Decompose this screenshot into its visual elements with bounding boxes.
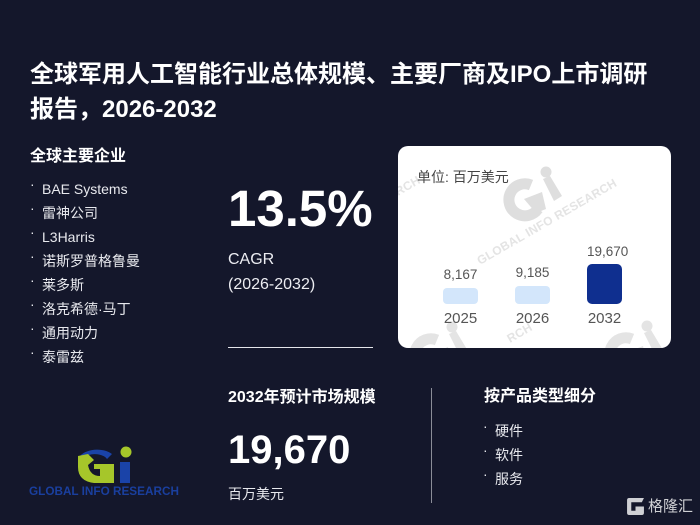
panel: product segments: · (483, 418, 488, 434)
panel: product segments: · (483, 466, 488, 482)
segment list (483, 418, 523, 487)
segment list: 硬件 (495, 423, 523, 439)
panel: product segments (483, 387, 596, 487)
vertical divider (431, 388, 432, 503)
logo text: 格隆汇 (648, 498, 693, 515)
panel: major companies: · (30, 344, 35, 360)
logo text: GLOBAL INFO RESEARCH (29, 485, 179, 498)
market size unit: 百万美元 (228, 486, 284, 502)
divider (228, 347, 373, 348)
panel: major companies: · (30, 176, 35, 192)
company list: 莱多斯 (42, 277, 84, 293)
value labels: 9,185 (516, 265, 549, 280)
CAGR value: 13.5% (228, 180, 373, 237)
watermark: GLOBAL INFO RESEARCH (474, 176, 619, 268)
unit label: 单位: 百万美元 (417, 169, 509, 185)
company list: L3Harris (42, 229, 95, 245)
watermark: RCH (504, 320, 535, 346)
panel: product segments: · (483, 442, 488, 458)
value labels (444, 244, 628, 282)
bar 2032 (587, 264, 622, 304)
segment list: 服务 (495, 471, 523, 487)
panel: bar chart card: 19,670 (587, 244, 628, 259)
panel: major companies: · (30, 272, 35, 288)
value labels: 8,167 (444, 267, 477, 282)
watermark (398, 166, 662, 348)
year labels: 2026 (516, 310, 549, 327)
panel: major companies: · (30, 200, 35, 216)
company list: 泰雷兹 (42, 349, 84, 365)
year labels (444, 310, 621, 327)
logo: Global Info Research (29, 446, 179, 498)
panel: major companies: · (30, 224, 35, 240)
panel: bar chart card (398, 146, 671, 348)
company list: 诺斯罗普格鲁曼 (42, 253, 140, 269)
panel: major companies: · (30, 248, 35, 264)
logo: Gelonghui (627, 498, 693, 515)
CAGR label (228, 251, 315, 293)
panel: major companies (30, 147, 140, 365)
panel: major companies: · (30, 296, 35, 312)
market size heading: 2032年预计市场规模 (228, 389, 376, 406)
company list: BAE Systems (42, 181, 128, 197)
company list: 雷神公司 (42, 205, 98, 221)
heading: major companies: 全球主要企业 (30, 148, 126, 165)
company list: 洛克希德·马丁 (42, 301, 131, 317)
CAGR label: (2026-2032) (228, 276, 315, 293)
market size value: 19,670 (228, 428, 350, 472)
panel: major companies: · (30, 320, 35, 336)
heading: product segments: 按产品类型细分 (484, 388, 596, 405)
title: 全球军用人工智能行业总体规模、主要厂商及IPO上市调研报告，2026-2032 (30, 61, 647, 123)
bar 2025 (443, 288, 478, 304)
bar 2026 (515, 286, 550, 304)
CAGR label: CAGR (228, 251, 274, 268)
year labels: 2032 (588, 310, 621, 327)
year labels: 2025 (444, 310, 477, 327)
company list (30, 176, 140, 365)
segment list: 软件 (495, 447, 523, 463)
company list: 通用动力 (42, 325, 98, 341)
